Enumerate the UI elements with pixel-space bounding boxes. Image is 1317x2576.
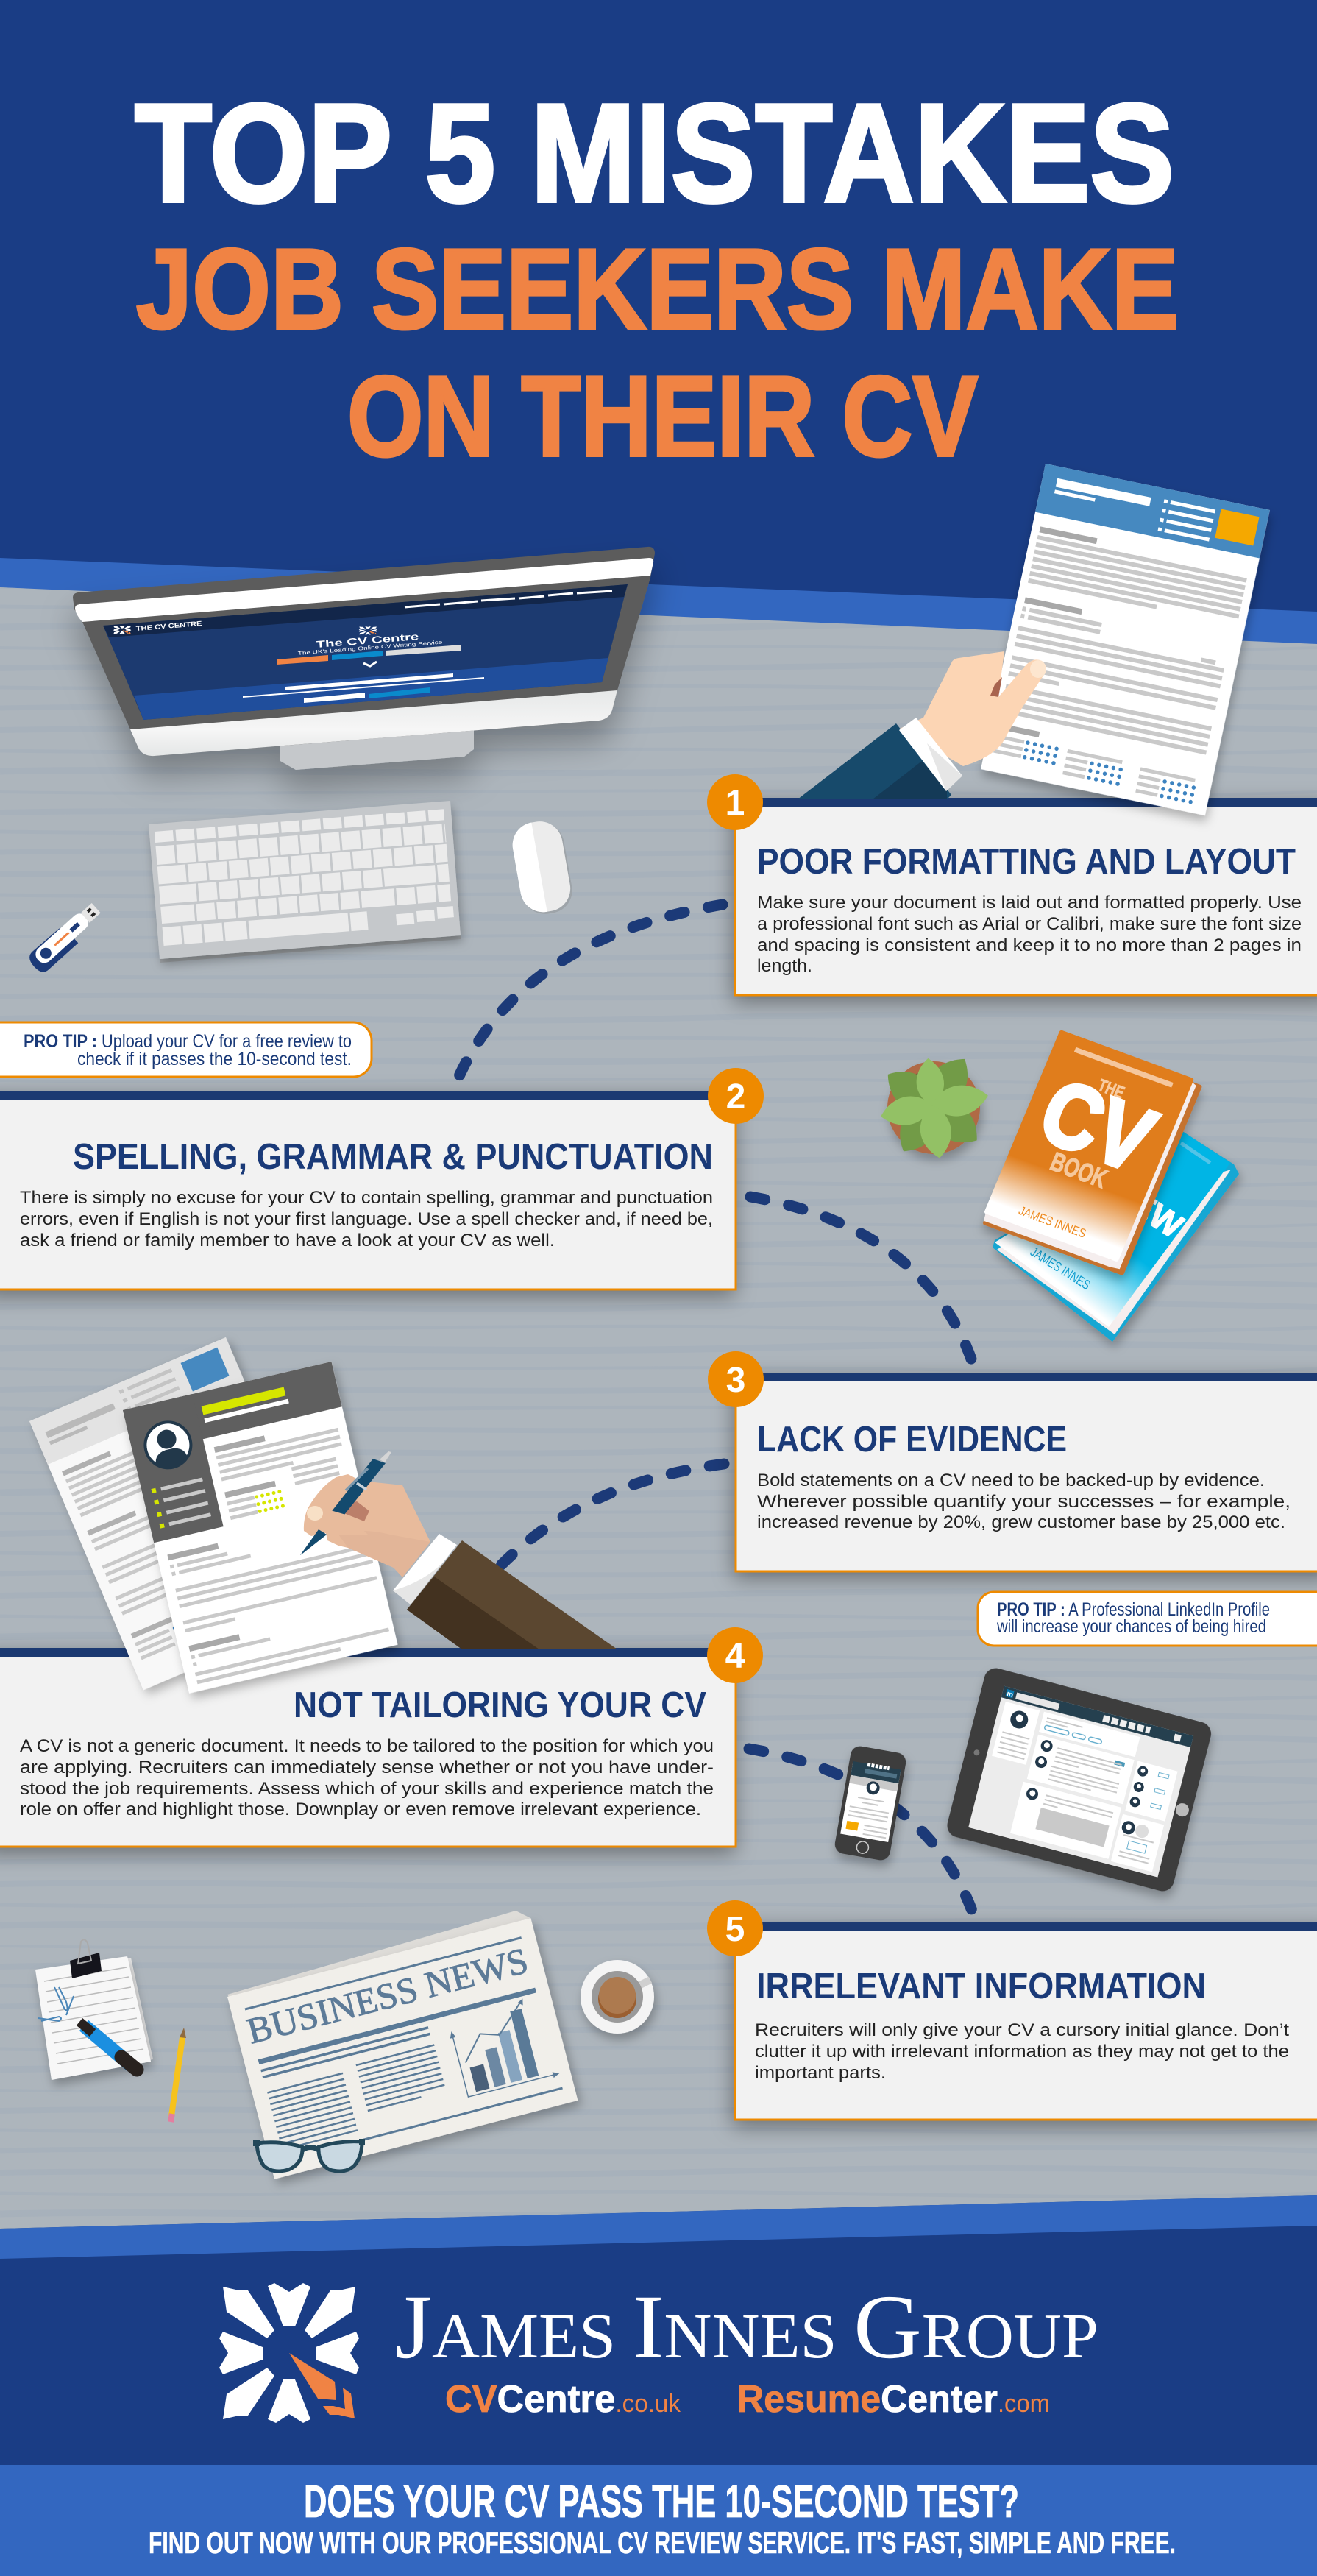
marker	[79, 2022, 137, 2070]
illustration: blue book: NEW	[1103, 1170, 1190, 1245]
body 1: Make sure your document is laid out and formatted properly. Use	[757, 893, 1302, 913]
body 3	[757, 1471, 1291, 1532]
title line 3: ON THEIR CV	[347, 353, 978, 480]
cuff	[393, 1534, 457, 1604]
back CV	[29, 1337, 340, 1690]
illustration: notepad with clips and marker	[35, 1939, 186, 2122]
number badge 4: 4	[725, 1637, 745, 1676]
panel 5: irrelevant information	[734, 1922, 1317, 2120]
panel 1: poor formatting	[734, 798, 1317, 995]
body 2	[20, 1188, 713, 1250]
number badge 4	[707, 1627, 763, 1683]
illustration: orange book	[979, 1030, 1204, 1275]
illustration: plant	[878, 1049, 990, 1160]
sleeve	[798, 723, 951, 799]
body 2: errors, even if English is not your first language. Use a spell checker and, if need be,	[20, 1209, 713, 1229]
illustration: CV documents and writing hand	[29, 1337, 617, 1694]
illustration: orange book: CV	[1026, 1061, 1168, 1192]
pro tip 1: check if it passes the 10-second test.	[77, 1049, 352, 1069]
heading 3: LACK OF EVIDENCE	[757, 1420, 1067, 1459]
body 4: stood the job requirements. Assess which of your skills and experience match the	[20, 1779, 714, 1799]
monitor top strip	[75, 558, 653, 622]
number badge 1: 1	[725, 784, 745, 823]
illustration: orange book: BOOK	[1046, 1146, 1112, 1194]
desk surface	[0, 587, 1317, 2229]
james innes group wordmark: JAMES INNES GROUP	[395, 2276, 1098, 2377]
binder clip	[70, 1939, 102, 1978]
hand	[900, 651, 1046, 766]
avatar	[139, 1416, 197, 1474]
pro tip 1: PRO TIP : Upload your CV for a free review to	[24, 1031, 352, 1052]
illustration: orange book: JAMES INNES	[1017, 1203, 1088, 1241]
number badge 5	[707, 1900, 763, 1956]
body 1: length.	[757, 956, 812, 976]
cv centre brand: CVCentre.co.uk	[445, 2378, 681, 2421]
brown sleeve	[407, 1540, 617, 1649]
number badge 1	[707, 774, 763, 830]
finger gap	[335, 1501, 369, 1521]
pen	[300, 1451, 391, 1555]
heading 2: SPELLING, GRAMMAR & PUNCTUATION	[73, 1137, 713, 1177]
footer logo star	[219, 2283, 359, 2423]
illustration: coffee cup	[581, 1960, 654, 2034]
tablet profile card	[992, 1702, 1040, 1765]
body 2: There is simply no excuse for your CV to contain spelling, grammar and punctuation	[20, 1188, 713, 1208]
illustration: phone	[834, 1745, 907, 1861]
number badge 2	[708, 1068, 764, 1124]
dashed connector 3 to 4	[491, 1464, 724, 1575]
illustration: usb stick	[26, 900, 105, 975]
heading 4: NOT TAILORING YOUR CV	[294, 1685, 706, 1725]
monitor screen: The UK's Leading Online CV Writing Service	[298, 640, 443, 657]
pro tip 2	[978, 1592, 1317, 1646]
bottom blue band	[0, 2195, 1317, 2259]
pencil	[171, 2028, 186, 2122]
call to action background	[0, 2465, 1317, 2576]
monitor screen: THE CV CENTRE	[135, 620, 202, 632]
illustration: desktop monitor	[73, 547, 655, 770]
illustration: blue book: JAMES INNES	[1028, 1244, 1093, 1292]
illustration: mouse	[509, 818, 576, 918]
heading 5: IRRELEVANT INFORMATION	[756, 1967, 1206, 2006]
panel 3: lack of evidence	[734, 1373, 1317, 1571]
call to action	[149, 2477, 1176, 2560]
illustration: keyboard	[149, 801, 461, 963]
body 1	[757, 893, 1302, 976]
newspaper chart	[445, 1995, 560, 2101]
illustration: blue book	[993, 1130, 1239, 1342]
body 5: Recruiters will only give your CV a cursory initial glance. Don’t	[755, 2020, 1289, 2040]
illustration: hand holding CV	[798, 464, 1270, 815]
monitor chin	[130, 690, 617, 756]
illustration: tablet	[945, 1666, 1214, 1894]
dashed connector 1 to 2	[459, 905, 723, 1076]
title line 1: TOP 5 MISTAKES	[135, 75, 1174, 231]
number badge 2: 2	[726, 1078, 745, 1117]
body 2: ask a friend or family member to have a look at your CV as well.	[20, 1231, 555, 1250]
panel 4: not tailoring	[0, 1648, 737, 1847]
monitor screen	[103, 584, 628, 720]
body 1: and spacing is consistent and keep it to no more than 2 pages in	[757, 935, 1302, 955]
pro tip 2: PRO TIP : A Professional LinkedIn Profile	[997, 1599, 1270, 1620]
dashed connector 4 to 5	[749, 1749, 974, 1917]
cuff	[899, 718, 962, 791]
body 5: important parts.	[755, 2063, 886, 2083]
title	[135, 75, 1179, 480]
body 4	[20, 1736, 714, 1819]
title line 2: JOB SEEKERS MAKE	[136, 225, 1179, 353]
body 3: Bold statements on a CV need to be backed-up by evidence.	[757, 1471, 1265, 1490]
paper clips	[38, 1987, 74, 2021]
body 4: role on offer and highlight those. Downplay or even remove irrelevant experience.	[20, 1800, 701, 1819]
body 5: clutter it up with irrelevant information as they may not get to the	[755, 2042, 1289, 2062]
number badge 3	[708, 1351, 764, 1407]
illustration: newspaper	[227, 1911, 578, 2179]
dashed connector 2 to 3	[750, 1197, 973, 1363]
body 3: increased revenue by 20%, grew customer base by 25,000 etc.	[757, 1512, 1285, 1532]
front CV	[123, 1362, 397, 1694]
body 1: a professional font such as Arial or Calibri, make sure the font size	[757, 914, 1302, 934]
illustration: tablet: in	[1006, 1690, 1014, 1699]
resume center brand: ResumeCenter.com	[737, 2378, 1050, 2421]
panel 2: spelling	[0, 1091, 737, 1289]
writing hand	[304, 1474, 430, 1577]
top blue band	[0, 558, 1317, 648]
pro tip 1	[0, 1022, 372, 1077]
number badge 3: 3	[726, 1361, 745, 1400]
illustration: newspaper: BUSINESS NEWS	[243, 1939, 532, 2052]
call to action headline: DOES YOUR CV PASS THE 10-SECOND TEST?	[304, 2477, 1019, 2527]
number badge 5: 5	[725, 1910, 745, 1949]
glasses	[253, 2142, 365, 2171]
CV document	[981, 464, 1270, 815]
monitor screen: The CV Centre	[316, 631, 419, 650]
body 4: A CV is not a generic document. It needs to be tailored to the position for which you	[20, 1736, 714, 1756]
body 3: Wherever possible quantify your successes – for example,	[757, 1492, 1291, 1512]
thumb	[307, 1507, 368, 1535]
body 5	[755, 2020, 1289, 2083]
illustration: orange book: THE	[1095, 1075, 1127, 1103]
body 4: are applying. Recruiters can immediately sense whether or not you have under-	[20, 1758, 714, 1777]
